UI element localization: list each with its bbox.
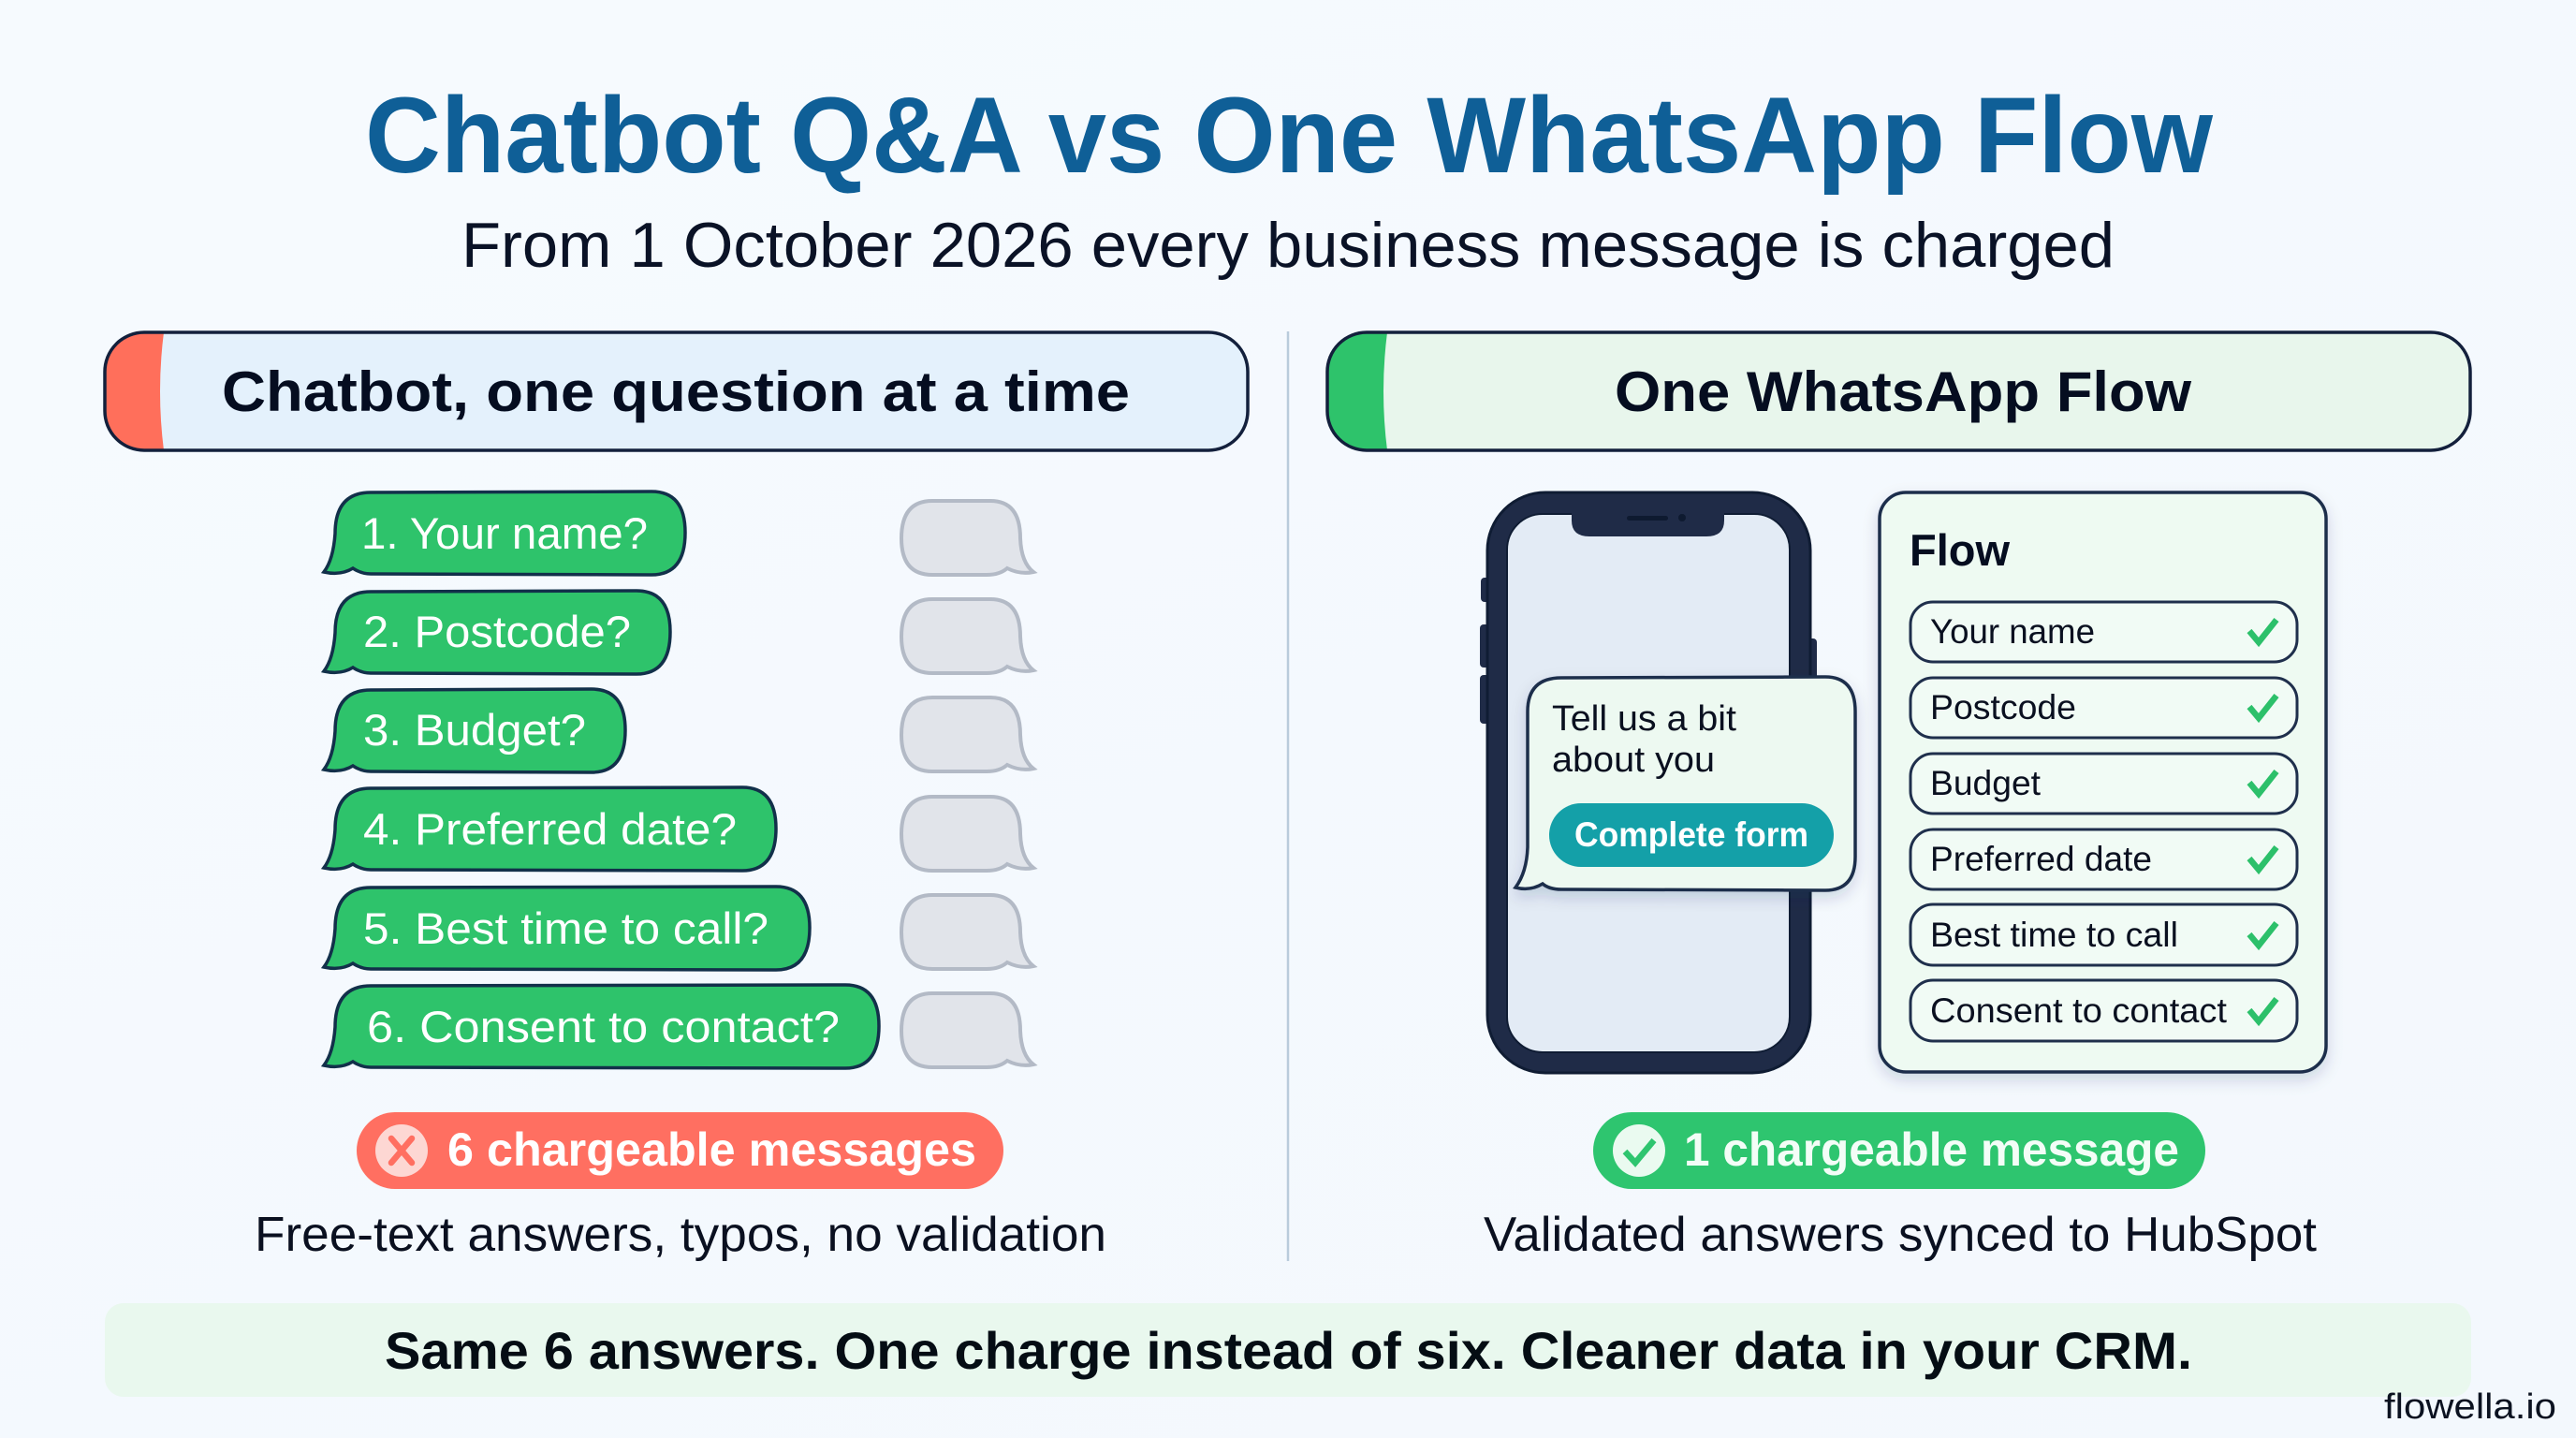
flow header bar	[1327, 332, 2470, 450]
bottom takeaway banner	[105, 1303, 2471, 1397]
button: complete form	[1549, 803, 1834, 867]
field: budget: Budget	[1930, 764, 2042, 802]
bubble: question 6: 6. Consent to contact?	[367, 1002, 840, 1051]
field: preferred date	[1910, 829, 2297, 889]
bubble: question 2	[324, 591, 670, 674]
bubble: question 4	[324, 787, 776, 871]
badge: 1 chargeable message	[1593, 1112, 2205, 1189]
field: your name	[1910, 602, 2297, 662]
field: consent to contact: Consent to contact	[1930, 991, 2228, 1030]
badge: 6 chargeable messages: 6 chargeable messages	[447, 1123, 976, 1176]
chatbot caption: Free-text answers, typos, no validation	[255, 1208, 1106, 1262]
panel: whatsapp flow	[1327, 332, 2470, 1262]
field: consent to contact	[1910, 980, 2297, 1041]
field: your name: Your name	[1930, 612, 2095, 651]
field: budget	[1910, 754, 2297, 814]
field: postcode: Postcode	[1930, 688, 2076, 726]
chat card message: about you	[1552, 741, 1715, 780]
phone illustration	[1480, 492, 1817, 1073]
bubble: question 1: 1. Your name?	[361, 508, 648, 558]
icon: cross	[375, 1124, 428, 1177]
flow header bar: One WhatsApp Flow	[1615, 360, 2191, 423]
title: Chatbot Q&A vs One WhatsApp Flow	[365, 76, 2214, 196]
form title: Flow	[1910, 525, 2010, 575]
chat card on phone	[1515, 677, 1855, 890]
bottom takeaway banner: Same 6 answers. One charge instead of six. Cleaner data in your CRM.	[385, 1321, 2192, 1380]
flow form card	[1880, 492, 2326, 1072]
chatbot header bar: Chatbot, one question at a time	[222, 360, 1130, 423]
panel divider	[1287, 331, 1289, 1261]
chat card message: Tell us a bit	[1552, 699, 1736, 739]
flow caption: Validated answers synced to HubSpot	[1484, 1208, 2318, 1262]
field: best time to call	[1910, 904, 2297, 965]
button: complete form: Complete form	[1574, 815, 1808, 854]
panel: chatbot	[105, 332, 1248, 1262]
bubble: question 4: 4. Preferred date?	[363, 804, 737, 854]
badge: 1 chargeable message: 1 chargeable message	[1684, 1123, 2179, 1176]
subtitle: From 1 October 2026 every business message is charged	[461, 210, 2115, 281]
field: best time to call: Best time to call	[1930, 916, 2178, 954]
field: preferred date: Preferred date	[1930, 840, 2152, 878]
chat card message	[1552, 699, 1736, 780]
bubble: question 1	[324, 492, 685, 575]
bubble: question 3: 3. Budget?	[363, 705, 586, 755]
field: postcode	[1910, 678, 2297, 738]
empty grey reply bubbles	[901, 501, 1033, 1067]
chat question bubbles	[324, 492, 879, 1068]
bubble: question 5: 5. Best time to call?	[363, 903, 768, 953]
icon: check	[1613, 1124, 1665, 1177]
bubble: question 3	[324, 689, 625, 772]
badge: 6 chargeable messages	[357, 1112, 1003, 1189]
brand mark: flowella.io	[2384, 1387, 2556, 1427]
bubble: question 2: 2. Postcode?	[363, 607, 631, 656]
bubble: question 6	[324, 985, 879, 1068]
chatbot header bar	[105, 332, 1248, 450]
bubble: question 5	[324, 887, 810, 970]
